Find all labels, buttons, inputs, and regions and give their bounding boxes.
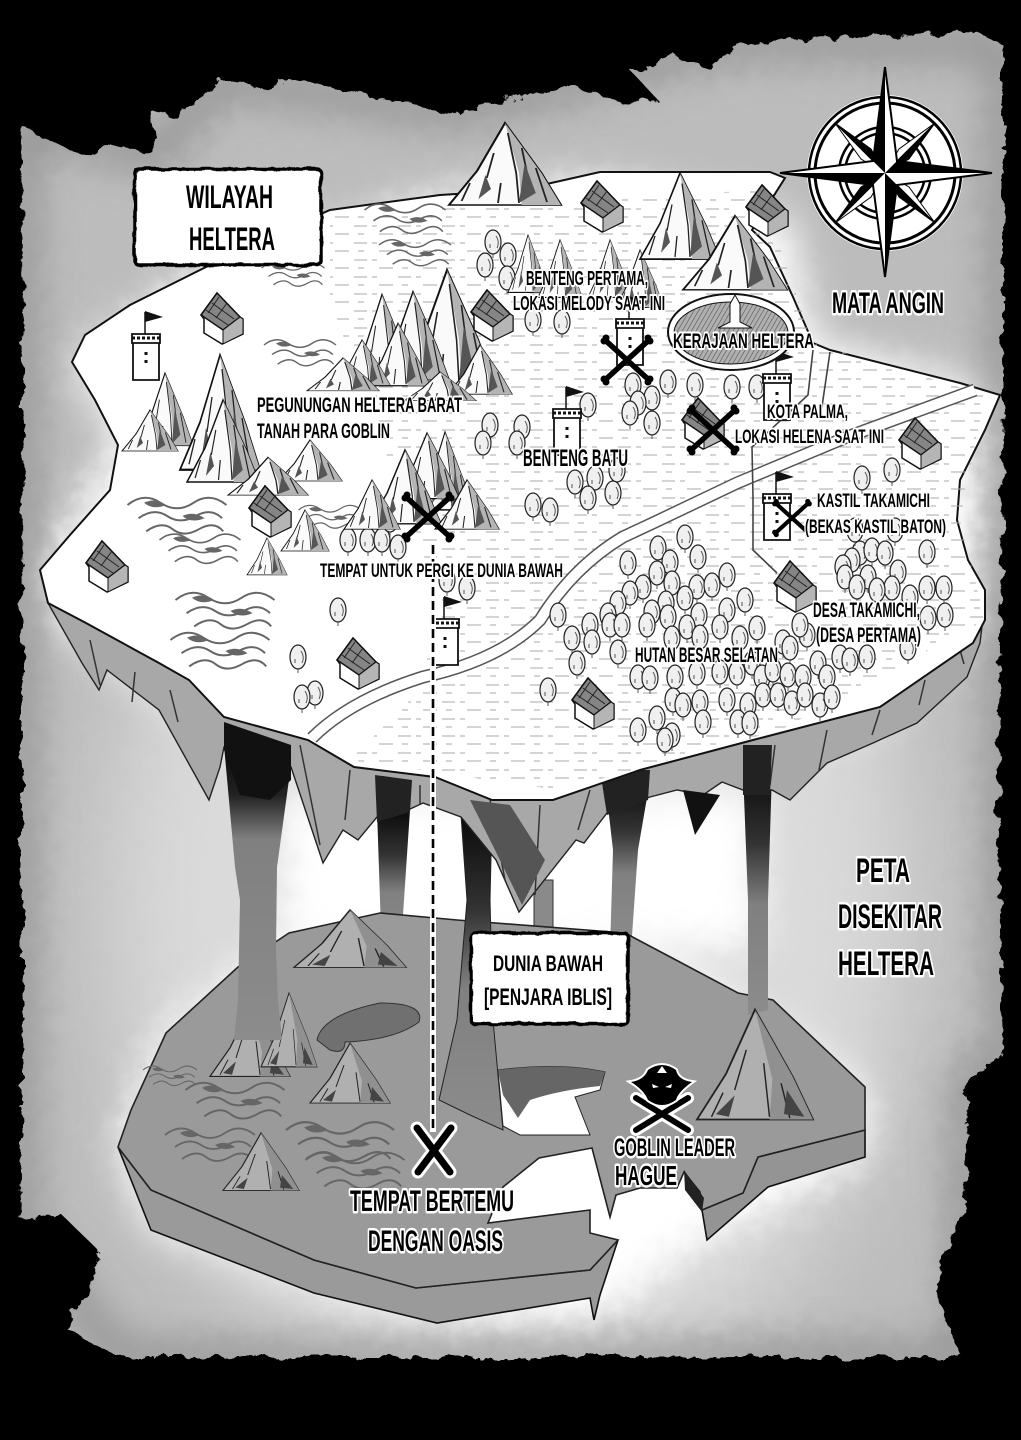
page title: Peta Disekitar Heltera	[838, 852, 942, 983]
map place labels	[257, 268, 946, 667]
rear rock pillars	[377, 780, 650, 960]
map place labels: DESA TAKAMICHI,	[813, 599, 920, 622]
lower island: Dunia Bawah	[118, 910, 865, 1323]
chasm with white opening	[498, 1066, 605, 1135]
upper island top surface	[40, 123, 1000, 800]
box title: Wilayah Heltera: HELTERA	[189, 221, 275, 257]
houses	[86, 181, 941, 729]
Kerajaan Heltera walled city	[668, 294, 794, 370]
lower island cliff side	[118, 1147, 618, 1323]
icon: goblin skull and crossbones	[631, 1065, 692, 1130]
map place labels: HUTAN BESAR SELATAN	[635, 644, 778, 667]
box title: Dunia Bawah: [PENJARA IBLIS]	[484, 984, 612, 1011]
lower right mountain	[697, 1010, 813, 1119]
upper island cliff underside	[48, 600, 985, 912]
box title: Dunia Bawah	[484, 951, 612, 1011]
map place labels: LOKASI MELODY SAAT INI	[513, 293, 665, 315]
lower island right cliff	[702, 1130, 865, 1240]
page title: Peta Disekitar Heltera: HELTERA	[838, 945, 934, 983]
trees	[290, 230, 953, 756]
main road inner	[312, 390, 975, 738]
plains texture	[330, 190, 985, 790]
lower island top surface	[118, 913, 865, 1288]
cross marks	[402, 334, 812, 542]
compass rose	[780, 67, 992, 277]
label: Goblin Leader Hague	[614, 1134, 735, 1191]
label: Mata Angin: MATA ANGIN	[832, 287, 944, 320]
map place labels: (DESA PERTAMA)	[816, 624, 921, 647]
callout box: Wilayah Heltera	[135, 169, 321, 265]
label: Goblin Leader Hague: GOBLIN LEADER	[614, 1134, 735, 1162]
lower mountains	[210, 910, 406, 1190]
dark ground ridges	[143, 1066, 404, 1189]
dark recess under Hague	[684, 1170, 704, 1212]
box title: Dunia Bawah: DUNIA BAWAH	[493, 951, 603, 976]
cross mark: meeting place	[417, 1128, 451, 1172]
map place labels: KERAJAAN HELTERA	[673, 330, 814, 353]
callout box: Dunia Bawah	[471, 933, 628, 1024]
underground lake	[317, 1003, 420, 1051]
label: Tempat Bertemu Dengan Oasis	[350, 1185, 514, 1258]
chasm shadow	[498, 1066, 605, 1118]
map place labels: TANAH PARA GOBLIN	[257, 420, 390, 443]
map place labels: BENTENG BATU	[523, 445, 628, 472]
page title: Peta Disekitar Heltera: DISEKITAR	[838, 898, 942, 936]
main road	[312, 390, 975, 738]
label: Tempat Bertemu Dengan Oasis: DENGAN OASIS	[368, 1225, 503, 1258]
page title: Peta Disekitar Heltera: PETA	[856, 852, 910, 890]
castles with flags	[132, 296, 794, 665]
map place labels: TEMPAT UNTUK PERGI KE DUNIA BAWAH	[320, 561, 563, 582]
front rock pillars	[224, 745, 772, 1130]
wavy hills	[128, 204, 451, 669]
map place labels: KASTIL TAKAMICHI	[817, 491, 930, 512]
box title: Wilayah Heltera	[186, 179, 275, 257]
label: Tempat Bertemu Dengan Oasis: TEMPAT BERTEMU	[350, 1185, 514, 1218]
dashed route to the underworld	[430, 545, 436, 1132]
label: Goblin Leader Hague: HAGUE	[615, 1160, 677, 1191]
map place labels: PEGUNUNGAN HELTERA BARAT	[257, 394, 462, 417]
mountains	[122, 123, 787, 575]
side roads	[752, 350, 830, 573]
map place labels: LOKASI HELENA SAAT INI	[735, 427, 884, 448]
box title: Wilayah Heltera: WILAYAH	[186, 179, 273, 215]
map place labels: KOTA PALMA,	[767, 402, 848, 423]
map place labels: BENTENG PERTAMA,	[526, 268, 648, 290]
